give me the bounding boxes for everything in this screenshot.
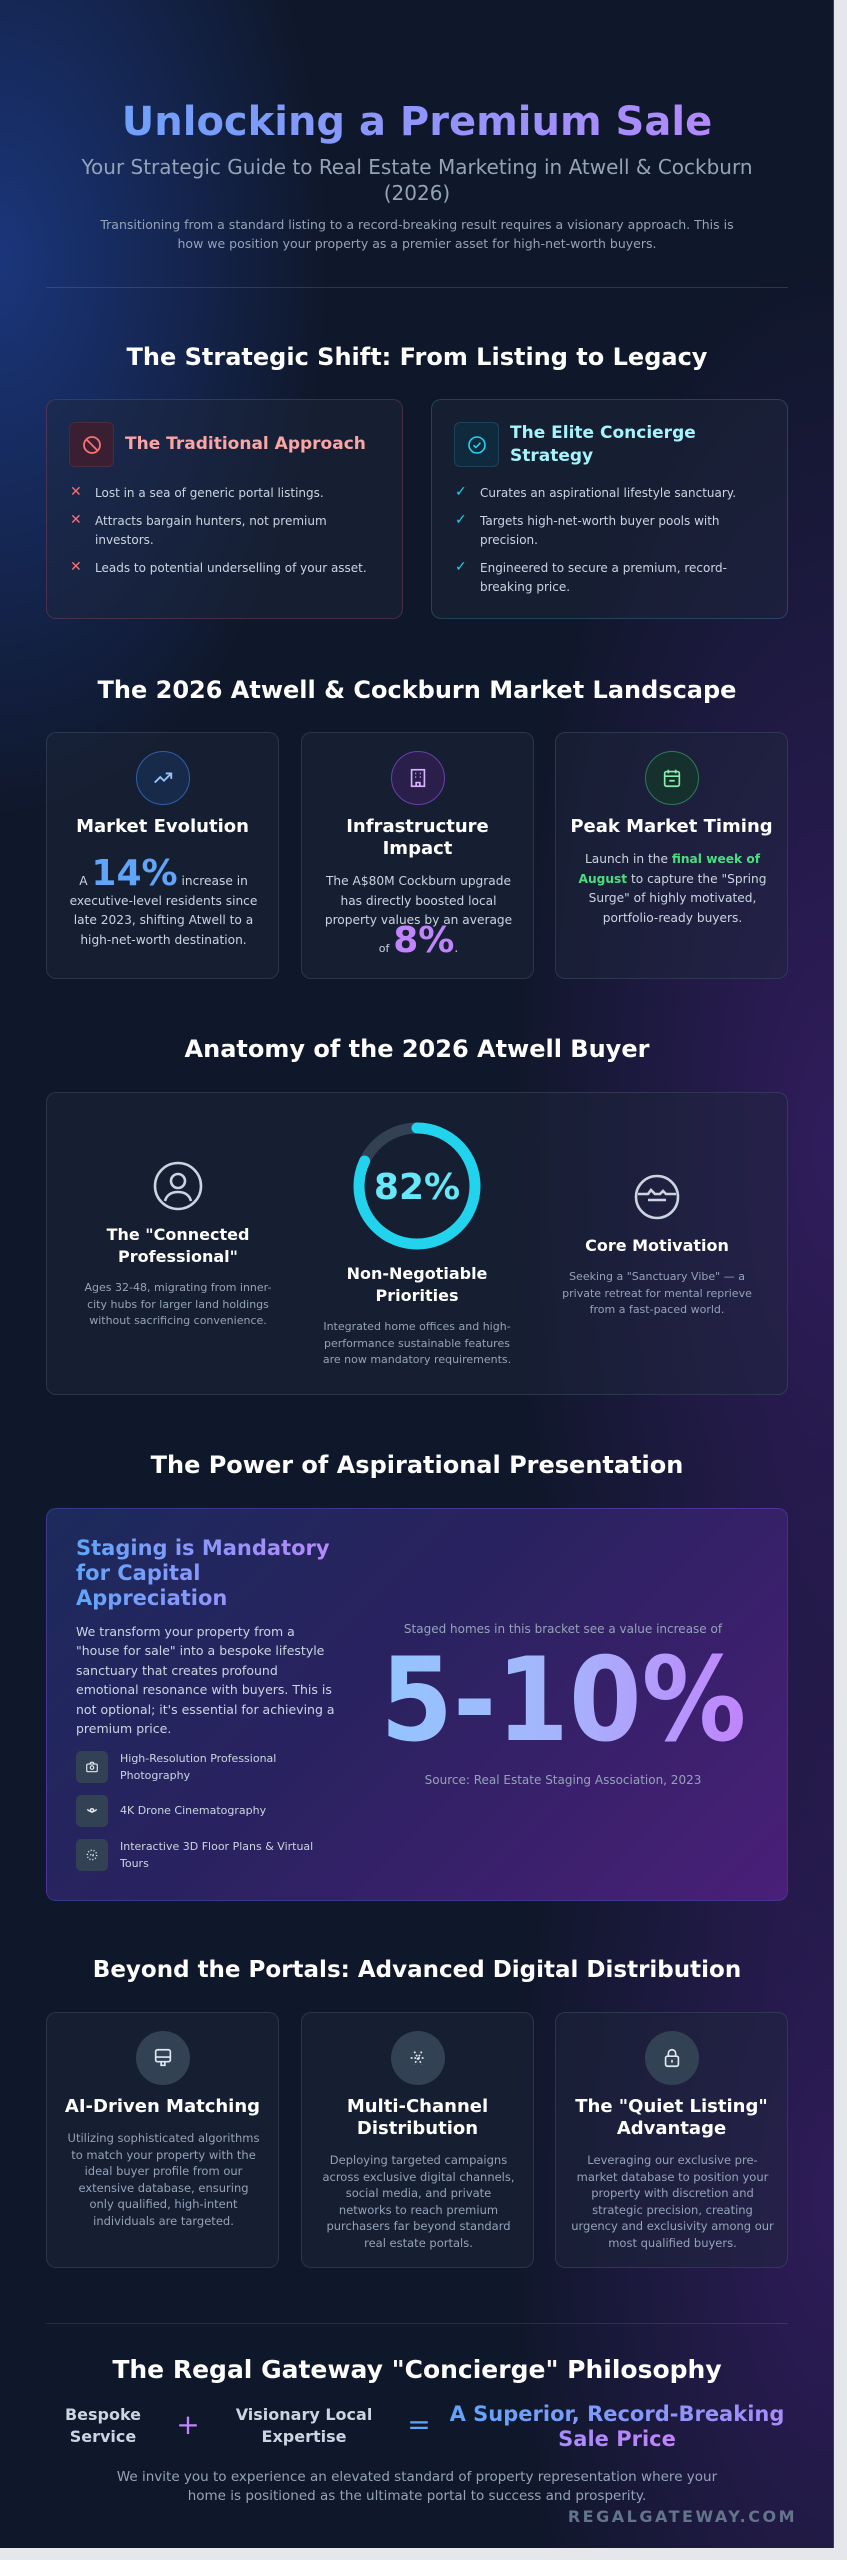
panel: AI-driven matching: [46, 2012, 279, 2268]
icon: building: [391, 751, 445, 805]
heading: The Elite Concierge Strategy: [510, 423, 696, 466]
list: ✓: [455, 559, 467, 575]
chart: 82% donut: [354, 1122, 480, 1250]
panel: market evolution: [46, 732, 279, 979]
panel: AI-driven matching: AI-Driven Matching: [65, 2096, 260, 2117]
chart: 82% donut: 82%: [374, 1167, 460, 1208]
panel: quiet listing: The "Quiet Listing" Advantage: [575, 2096, 768, 2139]
icon: check badge: [454, 422, 499, 467]
column: connected professional: Ages 32-48, migrating from inner-city hubs for larger land holdings without sacrificing convenience.: [85, 1281, 271, 1327]
icon: broadcast: [391, 2031, 445, 2085]
list: [70, 484, 367, 575]
panel: market evolution: Market Evolution: [76, 816, 249, 837]
panel: peak market timing: Peak Market Timing: [570, 816, 773, 837]
icon: camera: [76, 1751, 108, 1783]
stat: 5-10%: Staged homes in this bracket see a value increase of: [404, 1622, 722, 1636]
list: Lost in a sea of generic portal listings.: [95, 486, 324, 500]
feature list: Interactive 3D Floor Plans & Virtual Tours: [120, 1840, 313, 1870]
column: 82% ring: [323, 1122, 511, 1366]
panel: infrastructure impact: Infrastructure Impact: [346, 816, 489, 859]
icon: sanctuary: [634, 1174, 680, 1220]
equation: =: [407, 2408, 431, 2441]
column: 82% ring: Non-Negotiable Priorities: [347, 1264, 487, 1305]
subtitle: Your Strategic Guide to Real Estate Marketing in Atwell & Cockburn (2026): [81, 155, 753, 205]
column: connected professional: The "Connected Professional": [107, 1225, 249, 1266]
heading: strategic shift: The Strategic Shift: From Listing to Legacy: [127, 343, 707, 371]
column: core motivation: [562, 1174, 752, 1316]
feature list: High-Resolution Professional Photography: [120, 1752, 276, 1782]
list: [455, 484, 736, 594]
list: Leads to potential underselling of your asset.: [95, 561, 367, 575]
list: ✓: [455, 512, 467, 528]
intro text: Transitioning from a standard listing to a record-breaking result requires a visionary approach. This is how we position your property as a premier asset for high-net-worth buyers.: [100, 217, 734, 251]
title: [0, 98, 834, 146]
column: core motivation: Seeking a "Sanctuary Vibe" — a private retreat for mental reprieve from a fast-paced world.: [562, 1270, 752, 1316]
icon: drone: [76, 1795, 108, 1827]
equation: +: [176, 2408, 200, 2441]
list: ✕: [70, 559, 82, 575]
equation: [65, 2402, 784, 2451]
list: ✓: [455, 484, 467, 500]
heading: concierge philosophy: The Regal Gateway "Concierge" Philosophy: [112, 2355, 722, 2384]
closing text: We invite you to experience an elevated standard of property representation where your home is positioned as the ultimate portal to success and prosperity.: [117, 2469, 717, 2504]
list: ✕: [70, 484, 82, 500]
panel: multi-channel: Multi-Channel Distribution: [347, 2096, 488, 2139]
stat text: The A$80M Cockburn upgrade has directly boosted local property values by an average of 8%.: [325, 874, 512, 960]
panel: peak market timing: [555, 732, 788, 979]
list: Curates an aspirational lifestyle sanctuary.: [480, 486, 736, 500]
panel: anatomy of buyer: [46, 1092, 788, 1395]
panel: quiet listing: [555, 2012, 788, 2268]
icon: 3d tour: [76, 1839, 108, 1871]
stat: 5-10%: 5-10%: [380, 1633, 746, 1768]
column: core motivation: Core Motivation: [585, 1236, 729, 1255]
heading: The Traditional Approach: [125, 434, 366, 454]
list: ✕: [70, 512, 82, 528]
column: 82% ring: Integrated home offices and high-performance sustainable features are now mandatory requirements.: [323, 1320, 511, 1366]
equation: Bespoke Service: [65, 2405, 141, 2446]
heading: anatomy: Anatomy of the 2026 Atwell Buyer: [185, 1035, 649, 1063]
panel: staging: [46, 1508, 788, 1901]
icon: prohibited: [69, 422, 114, 467]
panel: quiet listing: Leveraging our exclusive pre-market database to position your property with discretion and strategic precision, creating urgency and exclusivity among our most qualified buyers.: [571, 2153, 774, 2250]
heading: market landscape: The 2026 Atwell & Cockburn Market Landscape: [98, 676, 736, 704]
panel: multi-channel: Deploying targeted campaigns across exclusive digital channels, social media, and private networks to reach premium purchasers far beyond standard real estate portals.: [322, 2153, 515, 2250]
text: Launch in the final week of August to capture the "Spring Surge" of highly motivated, portfolio-ready buyers.: [579, 852, 766, 924]
icon: lock: [645, 2031, 699, 2085]
stat: 5-10%: Source: Real Estate Staging Association, 2023: [425, 1773, 701, 1787]
icon: trend: [136, 751, 190, 805]
panel: traditional approach: [46, 399, 403, 619]
text: We transform your property from a "house for sale" into a bespoke lifestyle sanctuary that creates profound emotional resonance with buyers. This is not optional; it's essential for achieving a premium price.: [76, 1624, 335, 1736]
panel: elite concierge strategy: [431, 399, 788, 619]
list: Attracts bargain hunters, not premium investors.: [95, 514, 327, 547]
icon: calendar: [645, 751, 699, 805]
brand: REGALGATEWAY.COM: [568, 2507, 797, 2526]
equation: A Superior, Record-Breaking Sale Price: [450, 2402, 784, 2451]
list: Targets high-net-worth buyer pools with precision.: [480, 514, 720, 547]
icon: user: [154, 1162, 202, 1210]
feature list: [76, 1751, 313, 1871]
column: connected professional: [84, 1162, 271, 1327]
title: Unlocking a Premium Sale: [122, 99, 712, 145]
heading: beyond the portals: Beyond the Portals: Advanced Digital Distribution: [93, 1957, 741, 1983]
stat text: A 14% increase in executive-level residents since late 2023, shifting Atwell to a high-net-worth destination.: [70, 853, 257, 946]
heading: staging mandatory: Staging is Mandatory for Capital Appreciation: [76, 1536, 330, 1610]
feature list: 4K Drone Cinematography: [120, 1804, 266, 1817]
list: Engineered to secure a premium, record-breaking price.: [480, 561, 727, 594]
heading: power of presentation: The Power of Aspirational Presentation: [151, 1451, 683, 1479]
panel: AI-driven matching: Utilizing sophisticated algorithms to match your property with the ideal buyer profile from our extensive database, ensuring only qualified, high-intent individuals are targeted.: [68, 2131, 259, 2228]
panel: infrastructure impact: [301, 732, 534, 979]
icon: monitor: [136, 2031, 190, 2085]
equation: Visionary Local Expertise: [236, 2405, 372, 2446]
panel: multi-channel: [301, 2012, 534, 2268]
